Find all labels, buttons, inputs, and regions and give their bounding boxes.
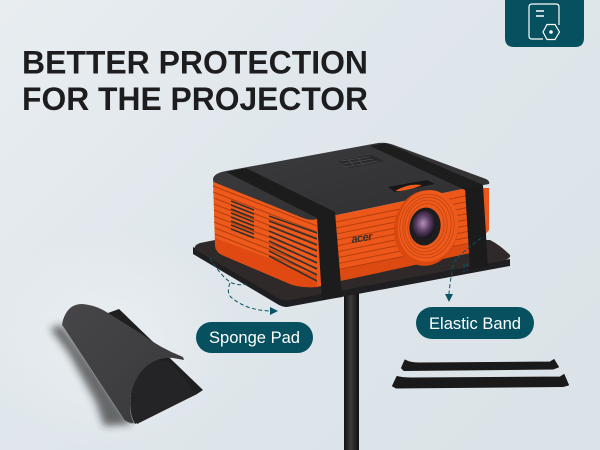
title: BETTER PROTECTION	[22, 44, 368, 80]
label: sponge pad	[196, 322, 313, 353]
acer logo: acer	[351, 231, 374, 246]
label: sponge pad: Sponge Pad	[209, 329, 300, 347]
lens housing	[388, 185, 464, 271]
pad edge highlight	[62, 325, 134, 424]
projector left side	[213, 180, 317, 287]
stand platform	[193, 240, 510, 307]
pad inner curl	[130, 360, 197, 424]
icon badge: document with nut	[505, 0, 584, 47]
label: elastic band	[416, 307, 534, 339]
pad curl surface	[62, 304, 184, 423]
sponge pad	[50, 304, 203, 426]
title: FOR THE PROJECTOR	[22, 81, 368, 117]
pad flat sheet	[108, 309, 203, 424]
projector	[213, 143, 489, 300]
projector front	[317, 188, 489, 287]
title	[22, 44, 368, 117]
elastic bands	[392, 360, 568, 388]
rear strap	[370, 143, 483, 190]
front strap	[226, 168, 342, 300]
label: elastic band: Elastic Band	[429, 315, 521, 333]
stand pole	[344, 292, 359, 450]
dashed arrow: elastic band	[445, 238, 481, 302]
pad shadow	[50, 325, 132, 426]
dashed arrow: sponge pad	[210, 258, 278, 315]
projector top	[213, 143, 489, 220]
